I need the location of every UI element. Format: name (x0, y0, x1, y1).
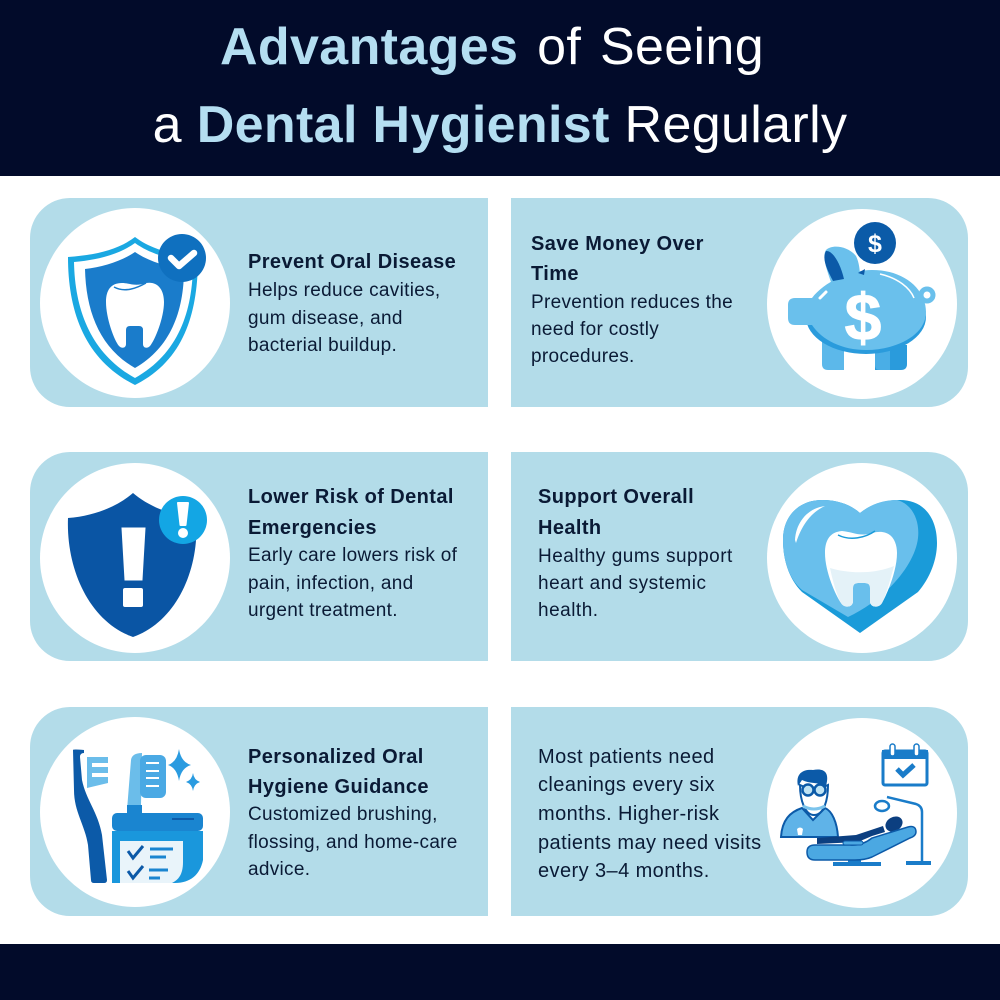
body line: Early care lowers risk of (248, 545, 457, 566)
title line 1: Advantages of Seeing (220, 18, 764, 76)
heading: Lower Risk of Dental (248, 486, 454, 508)
panel: personalized guidance (30, 707, 488, 916)
panel: visit frequency (511, 707, 968, 916)
body line: urgent treatment. (248, 600, 398, 621)
icon: hygienist, patient in chair and calendar (780, 743, 931, 866)
body line: heart and systemic (538, 573, 706, 594)
heading: Hygiene Guidance (248, 776, 429, 798)
circle: save money (767, 209, 957, 399)
heading: Emergencies (248, 517, 377, 539)
body line: cleanings every six (538, 774, 715, 796)
body line: Prevention reduces the (531, 292, 733, 313)
text: prevent oral disease (248, 251, 456, 356)
icon: heart with tooth (783, 500, 937, 633)
body line: pain, infection, and (248, 573, 414, 594)
circle: lower risk (40, 463, 230, 653)
body line: Healthy gums support (538, 546, 733, 567)
panel: save money (511, 198, 968, 407)
header band (0, 0, 1000, 176)
body line: patients may need visits (538, 832, 762, 854)
body line: gum disease, and (248, 308, 403, 329)
coin: $ (868, 230, 882, 258)
coin (854, 222, 896, 264)
text: overall health (538, 486, 733, 621)
icon: piggy bank with coin (788, 222, 936, 370)
body line: Most patients need (538, 746, 715, 768)
body line: bacterial buildup. (248, 335, 397, 356)
title line 2: a Dental Hygienist Regularly (153, 96, 847, 154)
body line: procedures. (531, 346, 635, 367)
panel: overall health (511, 452, 968, 661)
body line: health. (538, 600, 599, 621)
body line: flossing, and home-care (248, 832, 458, 853)
circle: prevent oral disease (40, 208, 230, 398)
heading: Save Money Over (531, 233, 704, 255)
calendar (882, 744, 928, 785)
body line: every 3–4 months. (538, 860, 710, 882)
footer band (0, 944, 1000, 1000)
text: visit frequency (538, 746, 762, 882)
heading: Prevent Oral Disease (248, 251, 456, 273)
panel: prevent oral disease (30, 198, 488, 407)
heading: Support Overall (538, 486, 694, 508)
hygienist (781, 770, 838, 837)
circle: personalized guidance (40, 717, 230, 907)
icon: toothbrushes and checklist (73, 749, 203, 883)
text: lower risk (248, 486, 457, 621)
heading: Health (538, 517, 602, 539)
text: personalized guidance (248, 746, 458, 880)
lamp (875, 797, 931, 865)
body line: Customized brushing, (248, 804, 438, 825)
icon: warning shield (68, 493, 207, 637)
circle: visit frequency (767, 718, 957, 908)
body line: advice. (248, 859, 310, 880)
body line: months. Higher-risk (538, 803, 719, 825)
heading: Time (531, 263, 579, 285)
panel: lower risk (30, 452, 488, 661)
text: save money (531, 233, 733, 367)
heading: Personalized Oral (248, 746, 424, 768)
body line: need for costly (531, 319, 659, 340)
circle: overall health (767, 463, 957, 653)
icon: shield with tooth and check (68, 234, 206, 385)
dollar sign: $ (845, 280, 881, 354)
patient in dental chair (807, 813, 916, 866)
body line: Helps reduce cavities, (248, 280, 440, 301)
